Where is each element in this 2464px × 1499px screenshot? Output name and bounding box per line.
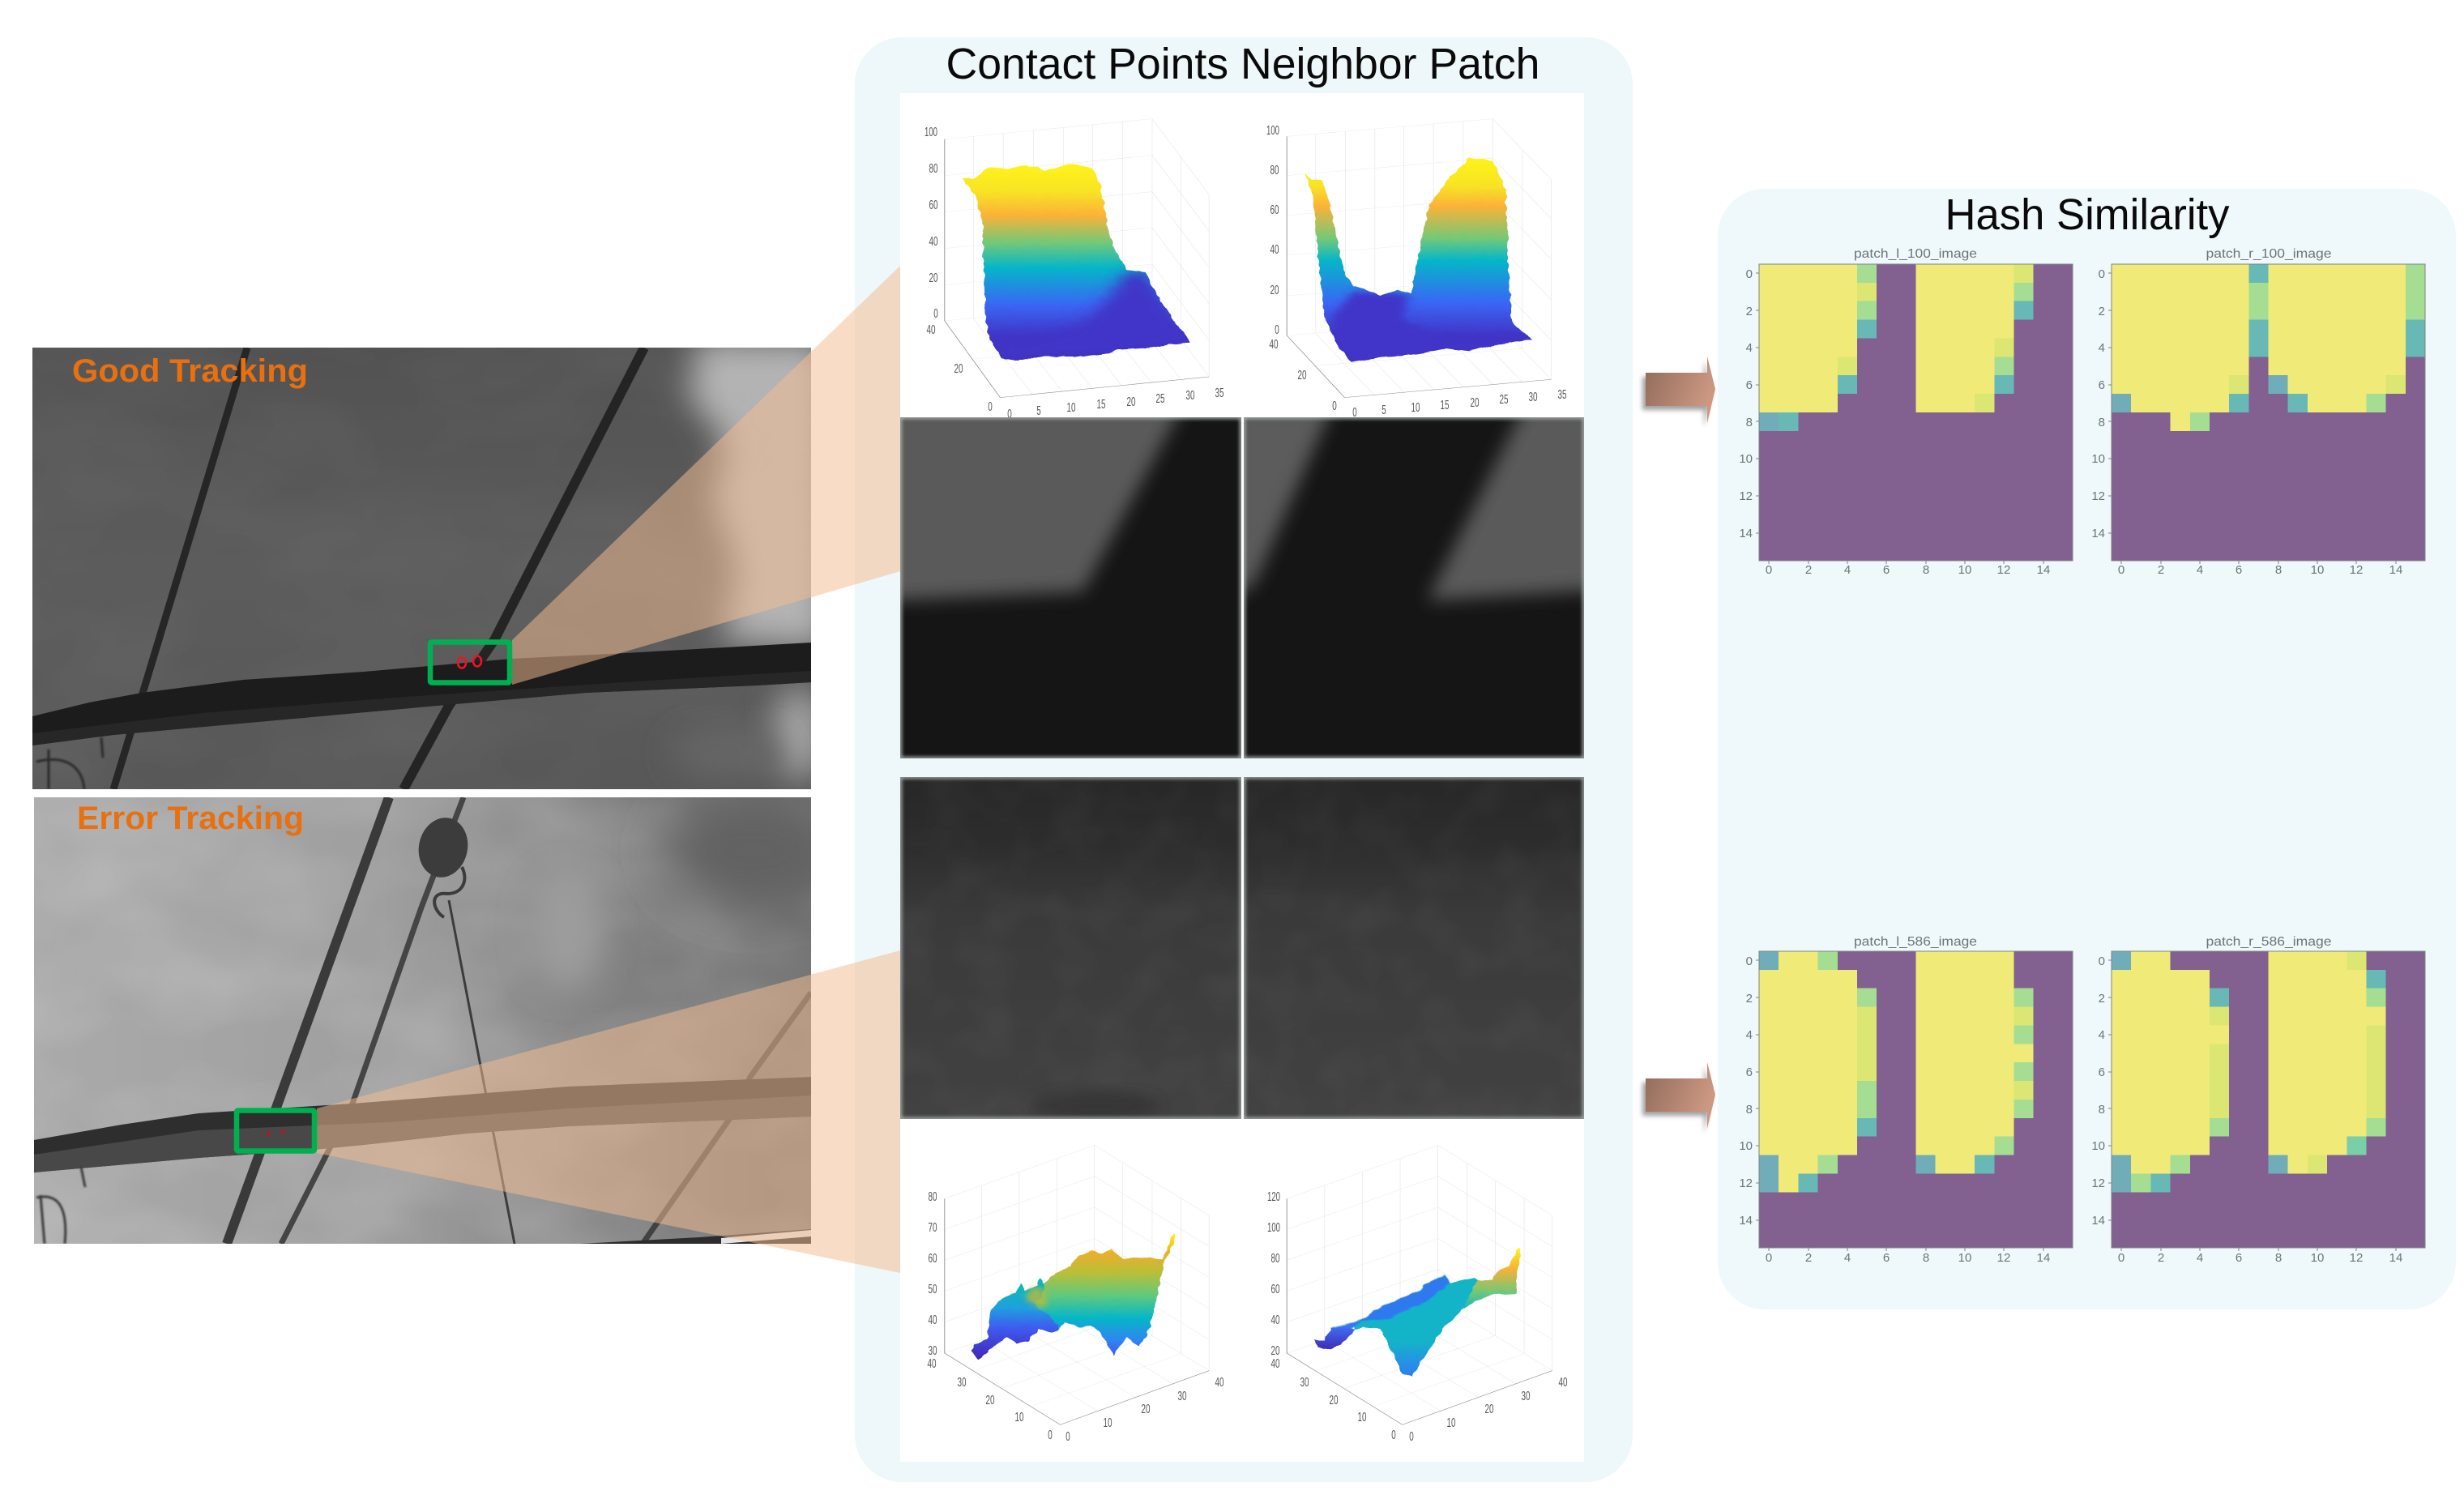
axis labels: 40	[1215, 1376, 1224, 1390]
contact points	[458, 656, 481, 668]
axis labels: 0	[933, 307, 938, 321]
heatmap: patch_l_100_image: 14	[1739, 527, 1753, 540]
axis labels: 0	[1275, 323, 1279, 337]
axis labels: 25	[1499, 393, 1509, 407]
axis labels: 100	[1266, 124, 1279, 138]
image patches: error tracking	[900, 777, 1584, 1121]
heatmap: patch_r_100_image: 4	[2099, 341, 2105, 355]
heatmap: patch_l_586_image: 2	[1746, 992, 1753, 1006]
axis labels	[925, 126, 1224, 421]
heatmap: patch_r_586_image: 12	[2091, 1177, 2105, 1190]
heatmap: patch_l_586_image: 8	[1923, 1251, 1929, 1265]
white chart area: bottom	[900, 777, 1584, 1462]
heatmap: patch_r_100_image: 14	[2091, 527, 2105, 540]
image patches: good tracking	[887, 405, 1596, 758]
axis labels: 30	[929, 1344, 937, 1358]
axis labels: 80	[1270, 164, 1279, 177]
heatmap: patch_r_586_image: 2	[2158, 1251, 2164, 1265]
axis labels: 40	[927, 1357, 937, 1371]
heatmap: patch_r_586_image: 10	[2311, 1251, 2324, 1265]
axis labels: 0	[1332, 399, 1337, 413]
heatmap: patch_r_100_image: 10	[2311, 563, 2324, 577]
title: contact points neighbor patch: Contact Points Neighbor Patch	[946, 40, 1539, 88]
axis labels: 20	[1270, 284, 1279, 297]
heatmap: patch_r_586_image: 8	[2275, 1251, 2282, 1265]
box: good tracking contact region	[430, 642, 510, 682]
heatmap: patch_l_586_image: 4	[1746, 1028, 1753, 1042]
axis labels: 20	[1484, 1403, 1494, 1416]
box: error tracking contact region	[237, 1110, 314, 1151]
heatmap: patch_r_100_image: 8	[2275, 563, 2282, 577]
axis labels: 15	[1097, 398, 1106, 412]
heatmap: patch_l_586_image: patch_l_586_image	[1854, 935, 1977, 949]
panel: hash similarity	[1718, 189, 2456, 1309]
axis labels: 5	[1036, 404, 1041, 418]
heatmap: patch_r_100_image: 2	[2158, 563, 2164, 577]
axis labels	[1267, 1190, 1568, 1444]
heatmap: patch_l_100_image: 0	[1766, 563, 1772, 577]
axis labels: 20	[954, 362, 963, 376]
axis labels: 60	[929, 199, 938, 212]
axis labels: 40	[927, 323, 936, 337]
axis labels: 20	[1126, 395, 1136, 409]
heatmap: patch_r_586_image: 8	[2099, 1103, 2105, 1117]
axis labels: 30	[1300, 1376, 1309, 1390]
axis labels: 50	[929, 1283, 937, 1296]
heatmap: patch_l_100_image: 4	[1844, 563, 1851, 577]
axis labels: 30	[958, 1376, 967, 1390]
callout: error tracking zoom cone	[317, 950, 900, 1273]
heatmap: patch_r_586_image: 14	[2091, 1214, 2105, 1228]
heatmap: patch_l_100_image: 0	[1746, 267, 1753, 281]
heatmap: patch_r_100_image: 6	[2099, 378, 2105, 392]
axis labels: 20	[929, 271, 938, 285]
heatmap: patch_l_586_image: 14	[1739, 1214, 1753, 1228]
heatmap: patch_r_100_image: 10	[2091, 452, 2105, 466]
axis labels: 40	[929, 235, 938, 249]
heatmap: patch_l_100_image: 8	[1746, 416, 1753, 429]
arrow: error tracking to hash	[1642, 1062, 1715, 1133]
heatmap: patch_l_100_image: 14	[2037, 563, 2050, 577]
heatmap: patch_l_586_image: 12	[1997, 1251, 2010, 1265]
axis labels: 20	[1298, 369, 1307, 382]
panel: contact points neighbor patch	[855, 37, 1633, 1482]
heatmap: patch_r_586_image: 4	[2197, 1251, 2203, 1265]
axis labels: 100	[1267, 1221, 1280, 1235]
axis labels: 100	[925, 126, 937, 139]
axis labels: 0	[1352, 406, 1357, 420]
heatmap: patch_l_100_image: 10	[1739, 452, 1753, 466]
axis labels: 5	[1381, 404, 1386, 417]
heatmap: patch_r_100_image: patch_r_100_image	[2206, 247, 2332, 261]
chart: 3D surface good right	[1266, 119, 1567, 420]
heatmap: patch_r_586_image: 10	[2091, 1139, 2105, 1153]
heatmap: patch_r_586_image: 4	[2099, 1028, 2105, 1042]
heatmap: patch_l_586_image: 12	[1739, 1177, 1753, 1190]
axis labels: 10	[1104, 1416, 1112, 1430]
heatmap: patch_r_100_image: 14	[2389, 563, 2402, 577]
heatmap: patch_l_100_image: 10	[1958, 563, 1971, 577]
contact points	[266, 1129, 285, 1136]
axis labels: 40	[1269, 338, 1279, 352]
heatmap: patch_l_586_image: 0	[1746, 954, 1753, 968]
axis labels: 10	[1358, 1411, 1367, 1424]
axis labels	[1266, 124, 1567, 420]
axis labels: 20	[1470, 396, 1480, 410]
patch: good right	[1232, 405, 1596, 758]
heatmap: patch_l_100_image: 12	[1739, 489, 1753, 503]
callout: good tracking zoom cone	[512, 266, 900, 685]
axis labels: 30	[1178, 1390, 1187, 1403]
axis labels: 70	[929, 1221, 937, 1235]
white chart area: top	[900, 93, 1584, 758]
heatmap: patch_r_586_image: 2	[2099, 992, 2105, 1006]
heatmap: patch_r_586_image: 14	[2389, 1251, 2402, 1265]
photo: error tracking	[34, 794, 843, 1244]
heatmap: patch_r_586_image: 12	[2350, 1251, 2363, 1265]
heatmap: patch_l_100_image: 2	[1746, 305, 1753, 318]
heatmap: patch_l_100_image: patch_l_100_image	[1854, 247, 1977, 261]
heatmap: patch_l_100_image: 6	[1883, 563, 1890, 577]
heatmap: patch_r_100_image: 12	[2350, 563, 2363, 577]
axis labels: 0	[1007, 408, 1012, 421]
heatmap: patch_r_100_image: 12	[2091, 489, 2105, 503]
axis labels: 30	[1186, 389, 1195, 403]
axis labels: 35	[1557, 388, 1567, 402]
heatmap: patch_l_100_image: 4	[1746, 341, 1753, 355]
axis labels: 60	[929, 1252, 937, 1266]
axis labels: 10	[1014, 1411, 1024, 1424]
axis labels: 0	[1409, 1430, 1414, 1444]
axis labels: 40	[1270, 243, 1279, 257]
axis labels: 25	[1155, 392, 1165, 406]
heatmap: patch_r_586_image: 6	[2099, 1066, 2105, 1079]
heatmap: patch_r_586_image: 6	[2236, 1251, 2242, 1265]
axis labels: 40	[929, 1313, 937, 1327]
axis labels: 80	[929, 1190, 937, 1204]
axis labels: 80	[929, 162, 938, 176]
heatmap: patch_r_586_image: patch_r_586_image	[2206, 935, 2332, 949]
heatmap: patch_r_100_image: 2	[2099, 305, 2105, 318]
axis labels: 40	[1270, 1357, 1280, 1371]
heatmap: patch_l_100_image: 6	[1746, 378, 1753, 392]
axis labels: 20	[1141, 1403, 1151, 1416]
heatmap: patch_l_586_image: 0	[1766, 1251, 1772, 1265]
axis labels: 0	[1065, 1430, 1070, 1444]
heatmap: patch_l_100_image: 8	[1923, 563, 1929, 577]
heatmap: patch_r_100_image: 6	[2236, 563, 2242, 577]
axis labels: 20	[1270, 1344, 1280, 1358]
axis labels: 80	[1270, 1252, 1280, 1266]
axis labels: 10	[1411, 401, 1420, 415]
chart: 3D surface error left	[927, 1145, 1224, 1444]
heatmap: patch_l_586_image: 6	[1883, 1251, 1890, 1265]
axis labels: 20	[985, 1394, 995, 1407]
heatmap: patch_l_586_image	[1739, 935, 2073, 1265]
axis labels	[927, 1190, 1224, 1444]
chart: 3D surface error right	[1267, 1145, 1568, 1444]
axis labels: 60	[1270, 203, 1279, 217]
label: error tracking: Error Tracking	[77, 801, 304, 836]
heatmap: patch_l_100_image: 12	[1997, 563, 2010, 577]
title: hash similarity: Hash Similarity	[1945, 190, 2230, 239]
heatmap: patch_r_100_image: 4	[2197, 563, 2203, 577]
axis labels: 30	[1522, 1390, 1531, 1403]
axis labels: 0	[988, 400, 993, 414]
heatmap: patch_r_586_image	[2091, 935, 2425, 1265]
heatmap: patch_l_100_image	[1739, 247, 2073, 577]
heatmap: patch_r_100_image	[2091, 247, 2425, 577]
axis labels: 30	[1528, 391, 1538, 404]
axis labels: 40	[1559, 1376, 1568, 1390]
heatmap: patch_l_100_image: 2	[1805, 563, 1812, 577]
heatmap: patch_l_586_image: 4	[1844, 1251, 1851, 1265]
heatmap: patch_l_586_image: 6	[1746, 1066, 1753, 1079]
heatmap: patch_l_586_image: 10	[1739, 1139, 1753, 1153]
axis labels: 10	[1066, 401, 1076, 415]
axis labels: 15	[1441, 399, 1450, 412]
axis labels: 40	[1270, 1313, 1280, 1327]
label: good tracking: Good Tracking	[72, 353, 308, 389]
axis labels: 60	[1270, 1283, 1280, 1296]
heatmap: patch_r_100_image: 0	[2118, 563, 2125, 577]
heatmap: patch_r_100_image: 0	[2099, 267, 2105, 281]
axis labels: 0	[1391, 1429, 1396, 1442]
axis labels: 0	[1048, 1429, 1053, 1442]
arrow: good tracking to hash	[1642, 357, 1715, 427]
heatmap: patch_l_586_image: 2	[1805, 1251, 1812, 1265]
heatmap: patch_r_586_image: 0	[2118, 1251, 2125, 1265]
heatmap: patch_l_586_image: 14	[2037, 1251, 2050, 1265]
patch: error right	[1244, 777, 1584, 1119]
patch: good left	[887, 405, 1241, 758]
chart: 3D surface good left	[925, 119, 1224, 421]
axis labels: 10	[1447, 1416, 1456, 1430]
patch: error left	[900, 777, 1241, 1121]
photo: good tracking	[32, 340, 826, 789]
heatmap: patch_l_586_image: 8	[1746, 1103, 1753, 1117]
axis labels: 120	[1267, 1190, 1280, 1204]
axis labels: 35	[1215, 386, 1224, 400]
heatmap: patch_l_586_image: 10	[1958, 1251, 1971, 1265]
heatmap: patch_r_586_image: 0	[2099, 954, 2105, 968]
heatmap: patch_r_100_image: 8	[2099, 416, 2105, 429]
axis labels: 20	[1329, 1394, 1339, 1407]
